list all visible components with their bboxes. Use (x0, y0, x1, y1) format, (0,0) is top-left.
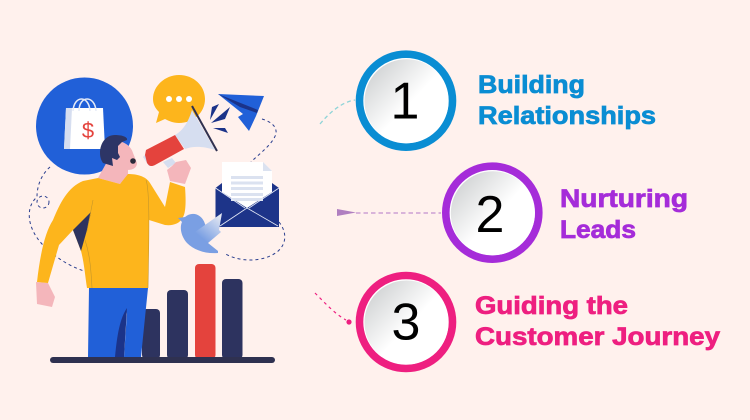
bar chart (50, 264, 275, 363)
icon: shopping bag circle (36, 78, 133, 174)
step 2 label: Nurturing (560, 185, 688, 213)
icon: megaphone (143, 106, 217, 184)
step 1 label: Building (478, 71, 585, 99)
icon: paper plane (210, 94, 264, 133)
step 1 label: Relationships (478, 102, 656, 130)
icon: bird (178, 213, 222, 253)
step 2 badge: 2 (476, 186, 504, 244)
step 3 label: Guiding the (475, 292, 628, 320)
dashed path right (224, 119, 285, 260)
step 3 badge (360, 276, 452, 368)
step 3 label: Customer Journey (475, 323, 720, 351)
icon: envelope (216, 162, 279, 227)
illustration: marketer with megaphone (29, 75, 285, 363)
step 1 badge: 1 (391, 72, 419, 130)
step 1 badge (360, 54, 452, 147)
dashed path left (29, 167, 84, 271)
arrow: step 3 (315, 293, 352, 325)
arrow: step 2 (337, 209, 441, 216)
step 3 badge: 3 (392, 294, 420, 352)
icon: speech bubble (153, 75, 205, 123)
arrow: step 1 (320, 100, 355, 124)
step 2 badge (446, 166, 539, 259)
icon: shopping bag circle: $ (82, 118, 94, 143)
step 2 label: Leads (560, 216, 636, 244)
person (36, 135, 186, 357)
